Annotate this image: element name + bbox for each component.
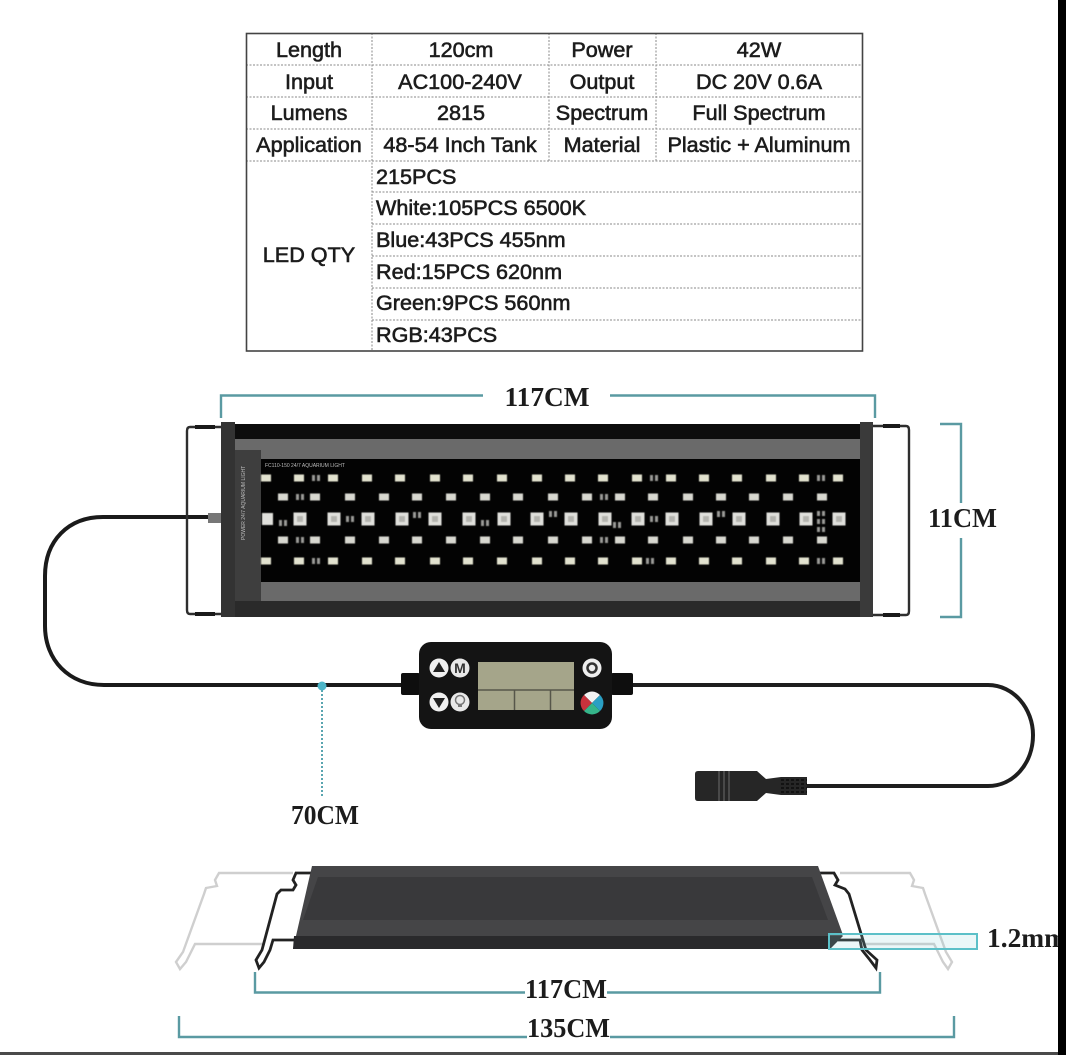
specification table: RGB:43PCS: [376, 322, 497, 347]
DC plug: [695, 771, 807, 801]
specification table: Application: [256, 132, 362, 157]
specification table: 2815: [437, 100, 485, 125]
LED rows: [261, 474, 846, 564]
dimension: total width 135CM: 135CM: [527, 1013, 610, 1043]
dimension: cable length 70CM: [291, 682, 359, 830]
specification table: [246, 33, 862, 351]
power cable to lamp: [45, 517, 402, 685]
specification table: White:105PCS 6500K: [376, 195, 587, 220]
specification table: Plastic + Aluminum: [667, 132, 851, 157]
specification table: Power: [571, 37, 633, 62]
specification table: Green:9PCS 560nm: [376, 290, 570, 315]
grey extended bracket: right: [840, 873, 952, 969]
dimension: height 11CM: [928, 424, 997, 617]
right bracket: [873, 426, 909, 615]
dimension: total width 135CM: [179, 1013, 954, 1043]
button: light: [450, 692, 470, 712]
grey extended bracket: left: [176, 873, 293, 969]
LCD screen: [478, 662, 574, 710]
button: RGB colour: [581, 692, 603, 714]
specification table: Lumens: [271, 100, 348, 125]
lamp model label: FC110-150 24/7 AQUARIUM LIGHT: [265, 463, 345, 469]
dimension: top width 117CM: [221, 382, 875, 418]
right strain relief: [611, 673, 633, 695]
black bracket: left: [256, 873, 311, 968]
left bracket: [187, 427, 222, 614]
lamp body: [293, 866, 843, 949]
dimension: cable length 70CM: 70CM: [291, 800, 359, 830]
controller: [401, 642, 633, 729]
dimension: thickness 1.2mm: 1.2mm: [987, 923, 1066, 953]
specification table: Output: [570, 69, 634, 94]
specification table: Red:15PCS 620nm: [376, 259, 562, 284]
dimension: bracket width 117CM: 117CM: [525, 974, 607, 1004]
lamp body: [222, 424, 872, 617]
specification table: 48-54 Inch Tank: [383, 132, 537, 157]
specification table: Input: [285, 69, 333, 94]
button: power: [582, 658, 602, 678]
specification table: 120cm: [429, 37, 493, 62]
dimension: bracket width 117CM: [255, 972, 880, 1004]
black bracket: right: [818, 873, 877, 968]
controller body: [419, 642, 612, 729]
dimension: top width 117CM: 117CM: [504, 382, 590, 412]
specification table: AC100-240V: [398, 69, 522, 94]
lamp top view: [187, 422, 909, 617]
button: up: [430, 658, 448, 678]
button: mode: M: [454, 660, 466, 676]
specification table: Material: [564, 132, 640, 157]
specification table: Blue:43PCS 455nm: [376, 227, 566, 252]
specification table: Length: [276, 37, 342, 62]
specification table: Full Spectrum: [692, 100, 826, 125]
button: down: [430, 692, 448, 712]
lamp side view with brackets: [176, 866, 952, 969]
specification table: Spectrum: [556, 100, 648, 125]
left strain relief: [401, 673, 420, 695]
lamp side label: POWER 24/7 AQUARIUM LIGHT: [241, 466, 247, 540]
button: mode: [450, 658, 470, 678]
specification table: DC 20V 0.6A: [696, 69, 823, 94]
cable to DC plug: [632, 685, 1033, 786]
specification table: LED QTY: [263, 242, 355, 267]
screen edge: bottom: [0, 1052, 1058, 1055]
dimension: thickness 1.2mm: [829, 923, 1066, 953]
screen edge: right: [1058, 0, 1066, 1055]
cable connector: [208, 513, 222, 523]
dimension: height 11CM: 11CM: [928, 503, 997, 533]
specification table: 42W: [737, 37, 782, 62]
specification table: 215PCS: [376, 164, 456, 189]
